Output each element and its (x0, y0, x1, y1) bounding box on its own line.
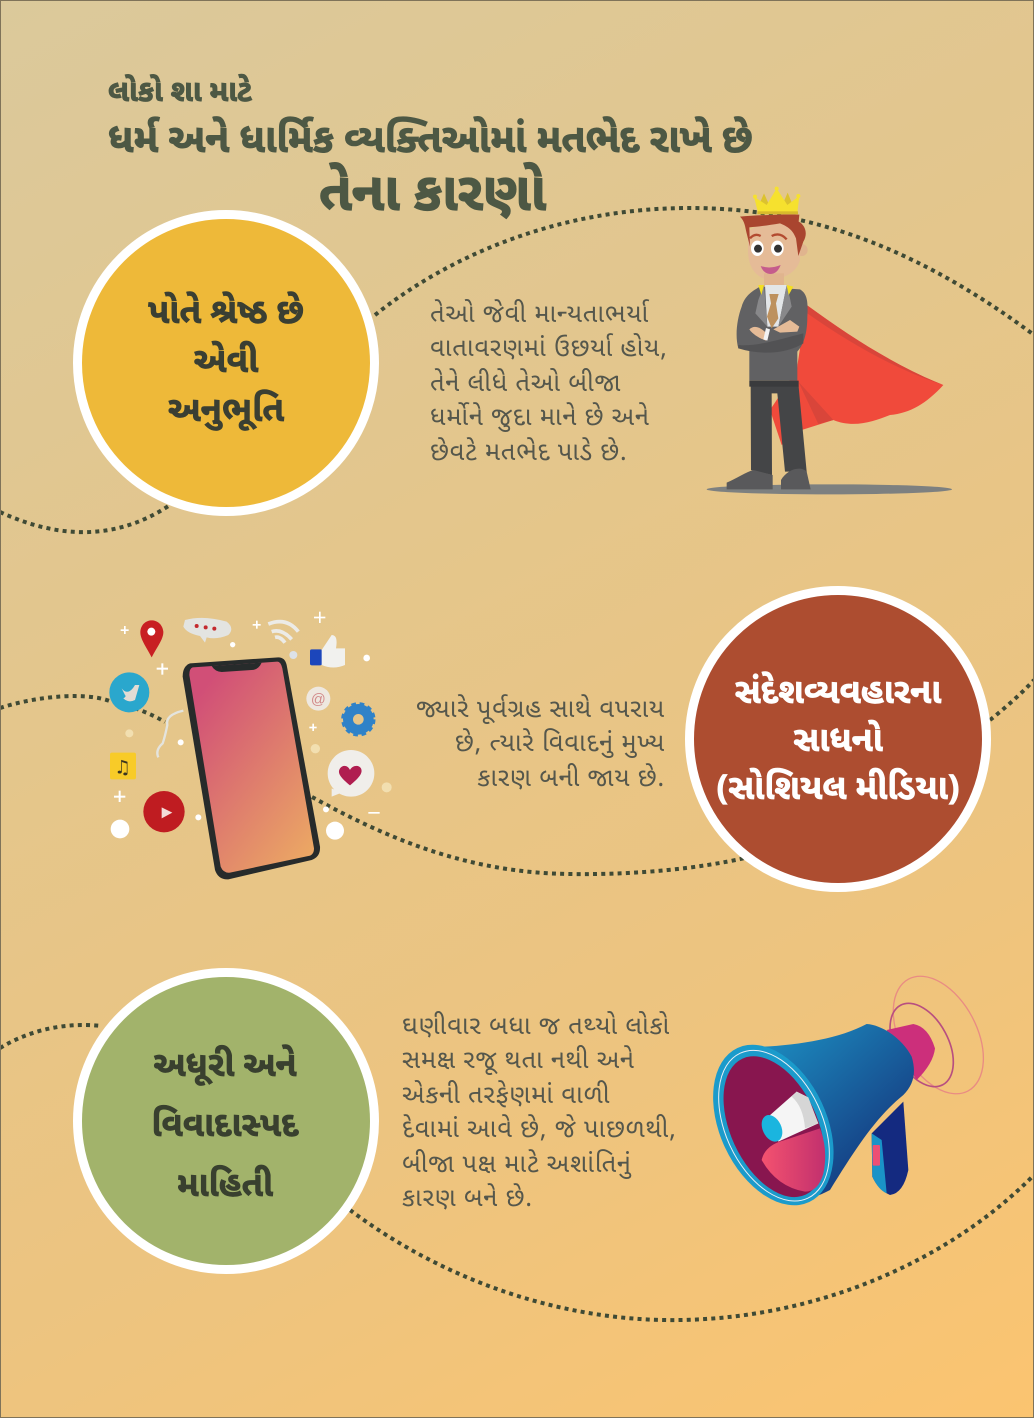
icon: music note (110, 753, 136, 779)
text block: third reason: કારણ બને છે. (402, 1184, 533, 1217)
legs (751, 383, 807, 475)
text block: third reason: બીજા પક્ષ માટે અશાંતિનું (402, 1150, 632, 1183)
handle (872, 1102, 908, 1195)
title (108, 74, 753, 232)
cable (157, 711, 183, 757)
shirt (765, 285, 787, 327)
text block: first reason: તેઓ જેવી માન્યતાભર્યા (430, 300, 649, 333)
icon: twitter (109, 672, 149, 712)
text block: third reason (402, 1011, 677, 1217)
icon: heart bubble (328, 750, 374, 797)
circle text (148, 291, 304, 436)
text block: first reason: વાતાવરણમાં ઉછર્યા હોય, (430, 334, 668, 367)
inner horn (703, 1040, 845, 1213)
rim (689, 1025, 858, 1225)
circle text: સાધનો (793, 721, 883, 766)
jacket (737, 287, 808, 381)
circle text: એવી (194, 342, 258, 387)
tie (767, 294, 779, 328)
phone (183, 657, 320, 879)
title line: reasons: તેના કારણો (319, 163, 546, 232)
icon: at sign (306, 687, 330, 711)
text block: first reason (430, 299, 668, 471)
inner pink (762, 1128, 825, 1192)
rear cap (887, 1024, 935, 1080)
horn body (718, 1024, 914, 1200)
circle text: પોતે શ્રેષ્ઠ છે (148, 293, 304, 338)
text block: first reason: છેવટે મતભેદ પાડે છે. (430, 438, 628, 471)
cape (770, 305, 943, 445)
icon: smartphone with social media symbols (109, 612, 392, 880)
title line: main heading: ધર્મ અને ધાર્મિક વ્યક્તિઓમાં મતભેદ રાખે છે (108, 118, 753, 169)
icon: wifi (268, 622, 298, 643)
circle text (716, 671, 960, 814)
text block: second reason (416, 694, 665, 797)
text block: second reason: જ્યારે પૂર્વગ્રહ સાથે વપરાય (416, 695, 665, 728)
eyes (751, 241, 764, 256)
panel: circle feeling of superiority (73, 210, 379, 516)
circle text: (સોશિયલ મીડિયા) (716, 769, 960, 814)
circle text: અધૂરી અને (153, 1046, 297, 1091)
icon: megaphone (713, 976, 984, 1206)
text block: third reason: એકની તરફેણમાં વાળી (402, 1081, 610, 1114)
icon: thumbs up (310, 635, 345, 668)
icon: map pin (140, 620, 163, 657)
head (796, 244, 808, 256)
circle text: માહિતી (177, 1166, 273, 1211)
shadow (707, 484, 952, 494)
driver tip (758, 1112, 786, 1145)
circle text (152, 1044, 299, 1211)
icon: play button (143, 791, 185, 832)
title line: small heading: લોકો શા માટે (108, 75, 252, 114)
text block: third reason: સમક્ષ રજૂ થતા નથી અને (402, 1046, 635, 1079)
circle text: સંદેશવ્યવહારના (735, 673, 941, 718)
panel: circle incomplete information (73, 968, 379, 1274)
circle text: વિવાદાસ્પદ (152, 1106, 298, 1151)
circle text: અનુભૂતિ (168, 391, 284, 436)
sparkles and dots (111, 612, 392, 840)
icon: superhero businessman with crown (706, 186, 952, 494)
text block: first reason: ધર્મોને જુદા માને છે અને (430, 403, 650, 436)
hair (740, 214, 806, 256)
icon: chat bubble (183, 618, 231, 643)
text block: second reason: છે, ત્યારે વિવાદનું મુખ્ય (455, 729, 665, 762)
eyebrows (750, 234, 787, 239)
icon: at sign: @ (311, 692, 326, 708)
shoes (727, 470, 773, 489)
text block: third reason: દેવામાં આવે છે, જે પાછળથી, (402, 1115, 677, 1148)
text block: first reason: તેને લીધે તેઓ બીજા (430, 369, 621, 402)
crown (753, 187, 800, 214)
icon: gear (343, 704, 374, 735)
text block: second reason: કારણ બની જાય છે. (477, 764, 665, 797)
driver white (768, 1092, 818, 1142)
icon: music note: ♫ (114, 757, 131, 778)
panel: circle communication media (685, 586, 991, 892)
sound rings (875, 961, 1002, 1109)
text block: third reason: ઘણીવાર બધા જ તથ્યો લોકો (402, 1012, 670, 1045)
lapels (755, 285, 767, 327)
arms (749, 327, 767, 341)
